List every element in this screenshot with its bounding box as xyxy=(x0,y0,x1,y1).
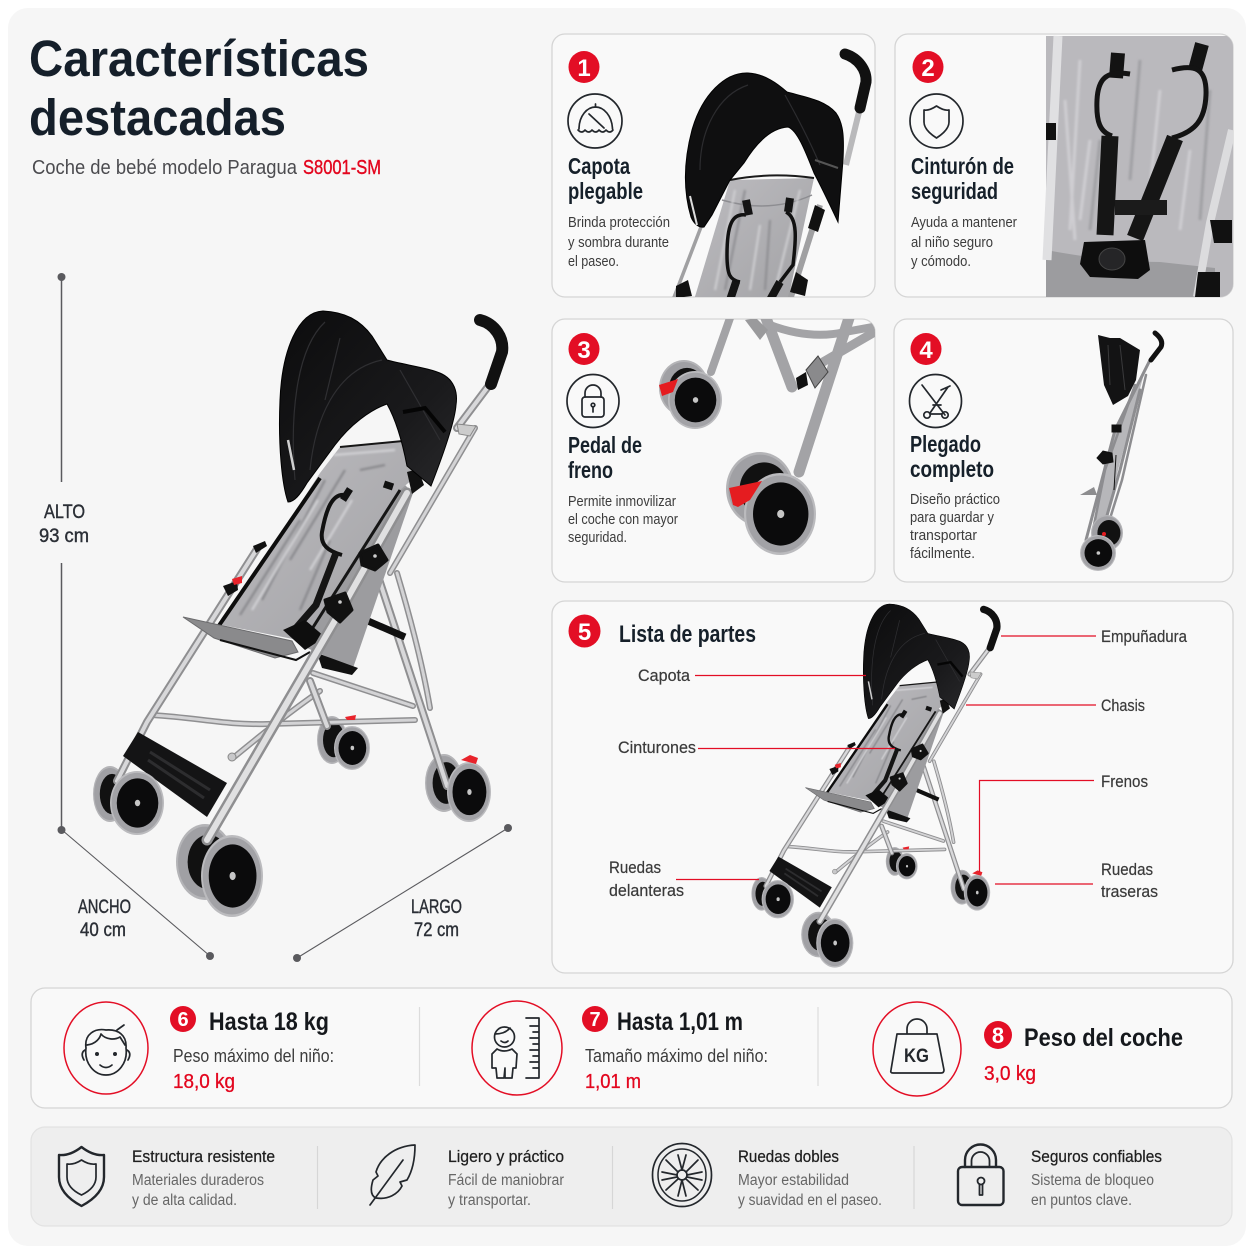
text xyxy=(738,1147,882,1209)
number 4: 4 xyxy=(919,337,933,364)
spec 8: stroller weight xyxy=(873,1002,1183,1096)
body text: Permite inmovilizar xyxy=(568,494,676,510)
text: Materiales duraderos xyxy=(132,1172,264,1189)
subtitle: S8001-SM xyxy=(303,157,381,179)
text: y de alta calidad. xyxy=(132,1192,237,1209)
body text xyxy=(568,494,678,546)
body text: el paseo. xyxy=(568,254,619,270)
number 7 xyxy=(582,1006,608,1032)
text: Fácil de maniobrar xyxy=(448,1172,564,1189)
heading xyxy=(910,431,994,482)
dimension: alto: 93 cm xyxy=(39,526,89,547)
subtitle: Coche de bebé modelo Paragua xyxy=(32,157,298,179)
number 7: 7 xyxy=(589,1009,601,1031)
dimension: largo xyxy=(293,824,512,962)
body text xyxy=(568,215,670,270)
number 2 xyxy=(912,51,944,83)
part labels: Capota xyxy=(638,667,691,685)
dimension: ancho: ANCHO xyxy=(78,897,131,918)
text: Sistema de bloqueo xyxy=(1031,1172,1154,1189)
body text xyxy=(910,492,1000,562)
part labels: Chasis xyxy=(1101,697,1145,715)
part labels: Empuñadura xyxy=(1101,628,1188,646)
body text: y sombra durante xyxy=(568,235,669,251)
value: 1,01 m xyxy=(585,1071,641,1093)
panel 2: cinturón de seguridad xyxy=(895,34,1233,297)
body text: para guardar y xyxy=(910,510,995,526)
heading: Hasta 18 kg xyxy=(209,1008,329,1036)
number 8: 8 xyxy=(992,1023,1004,1048)
icon: wheel xyxy=(652,1144,712,1206)
icon: folding canopy xyxy=(568,94,622,148)
folded stroller xyxy=(1080,333,1162,571)
icon: feather xyxy=(370,1145,415,1205)
text: Peso máximo del niño: xyxy=(173,1046,334,1066)
number 3: 3 xyxy=(577,337,591,364)
number 5 xyxy=(568,614,600,648)
text: Mayor estabilidad xyxy=(738,1172,849,1189)
part labels: Frenos xyxy=(1101,773,1148,791)
main stroller photo xyxy=(93,311,502,917)
benefits bar xyxy=(31,1127,1232,1226)
icon: padlock xyxy=(958,1144,1004,1205)
heading: Pedal de xyxy=(568,432,642,458)
part labels: Ruedas xyxy=(609,859,661,877)
body text: fácilmente. xyxy=(910,546,975,562)
panel 1: capota plegable xyxy=(552,34,875,300)
heading: Plegado xyxy=(910,431,981,457)
part labels: traseras xyxy=(1101,883,1158,901)
heading: Capota xyxy=(568,153,630,179)
text xyxy=(132,1147,275,1209)
text: y transportar. xyxy=(448,1192,531,1209)
stroller with parts xyxy=(751,604,997,968)
heading: seguridad xyxy=(911,178,998,204)
heading: Cinturón de xyxy=(911,153,1014,179)
heading xyxy=(568,153,643,204)
number 6: 6 xyxy=(177,1009,189,1031)
icon: baby face xyxy=(64,1002,148,1094)
number 4 xyxy=(910,333,942,365)
harness photo xyxy=(1046,36,1233,297)
leader lines xyxy=(676,636,1096,884)
spec 6: weight of child xyxy=(64,1002,334,1094)
number 1 xyxy=(568,51,600,83)
dimension: ancho xyxy=(58,826,214,960)
body text: y cómodo. xyxy=(911,254,971,270)
text xyxy=(1031,1147,1162,1209)
benefit: seguros confiables xyxy=(958,1144,1162,1209)
number 8 xyxy=(984,1021,1012,1049)
heading: freno xyxy=(568,457,613,483)
title: destacadas xyxy=(29,89,286,146)
icon: kg weight xyxy=(873,1002,961,1096)
part labels: Ruedas xyxy=(1101,861,1153,879)
spec 7: height of child xyxy=(472,1001,768,1095)
stroller canopy close-up xyxy=(673,54,866,300)
dimension: alto: ALTO xyxy=(44,502,85,523)
heading: Peso del coche xyxy=(1024,1024,1183,1052)
part labels: Cinturones xyxy=(618,739,696,757)
text: Seguros confiables xyxy=(1031,1147,1162,1166)
title xyxy=(29,30,369,146)
body text: seguridad. xyxy=(568,530,627,546)
panel 5: lista de partes xyxy=(552,601,1233,973)
body text: Diseño práctico xyxy=(910,492,1000,508)
panel 3: pedal de freno xyxy=(552,318,878,582)
icon: kg weight: KG xyxy=(904,1046,929,1067)
dimension: largo: 72 cm xyxy=(414,920,459,941)
heading: plegable xyxy=(568,178,643,204)
value: 18,0 kg xyxy=(173,1071,235,1093)
number 5: 5 xyxy=(578,619,591,646)
benefit: ruedas dobles xyxy=(652,1144,882,1209)
dimension: alto xyxy=(39,273,89,830)
heading: Hasta 1,01 m xyxy=(617,1008,743,1036)
heading: completo xyxy=(910,456,994,482)
heading xyxy=(568,432,642,483)
body text: transportar xyxy=(910,528,977,544)
text: Ligero y práctico xyxy=(448,1147,564,1166)
part labels: delanteras xyxy=(609,882,684,900)
dimension: ancho: 40 cm xyxy=(80,920,126,941)
icon: child with ruler xyxy=(472,1001,562,1095)
value: 3,0 kg xyxy=(984,1063,1036,1085)
body text xyxy=(911,215,1017,270)
body text: Ayuda a mantener xyxy=(911,215,1017,231)
body text: al niño seguro xyxy=(911,235,993,251)
icon: folded stroller xyxy=(910,374,962,428)
icon: lock xyxy=(567,374,619,428)
text xyxy=(448,1147,564,1209)
panel 4: plegado completo xyxy=(894,319,1233,582)
benefit: ligero y práctico xyxy=(370,1145,564,1209)
text: Tamaño máximo del niño: xyxy=(585,1046,768,1066)
icon: shield xyxy=(910,94,963,148)
part labels xyxy=(609,628,1188,901)
dimensions xyxy=(39,273,512,962)
body text: Brinda protección xyxy=(568,215,670,231)
text: Ruedas dobles xyxy=(738,1147,839,1166)
wheels close-up xyxy=(659,318,878,555)
number 6 xyxy=(170,1006,196,1032)
text: Estructura resistente xyxy=(132,1147,275,1166)
icon: shield xyxy=(59,1147,104,1206)
text: y suavidad en el paseo. xyxy=(738,1192,882,1209)
heading xyxy=(911,153,1014,204)
dimension: largo: LARGO xyxy=(411,897,462,918)
benefit: estructura resistente xyxy=(59,1147,275,1209)
text: en puntos clave. xyxy=(1031,1192,1132,1209)
number 2: 2 xyxy=(921,55,935,82)
heading: Lista de partes xyxy=(619,621,756,648)
body text: el coche con mayor xyxy=(568,512,678,528)
number 3 xyxy=(568,333,600,365)
number 1: 1 xyxy=(577,55,591,82)
specs bar xyxy=(31,988,1232,1108)
title: Características xyxy=(29,30,369,87)
